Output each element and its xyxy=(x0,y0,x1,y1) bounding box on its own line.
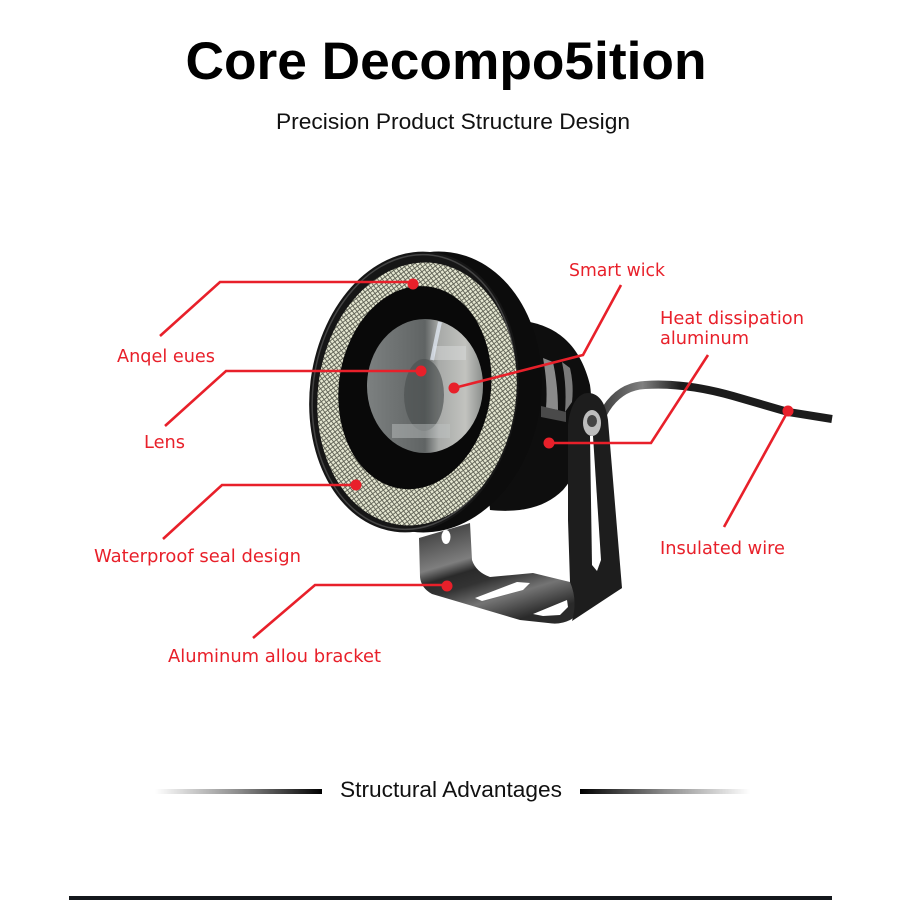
wire xyxy=(603,385,832,419)
product photo: lamp xyxy=(291,237,832,624)
callout: Heat dissipation aluminum xyxy=(544,308,804,448)
mounting bracket xyxy=(419,393,622,624)
callout: Insulated wire xyxy=(660,406,794,559)
callout: Smart wick: Smart wick xyxy=(569,260,666,281)
title: Core Decompo5ition xyxy=(186,32,706,91)
callout: Insulated wire: Insulated wire xyxy=(660,538,785,559)
bottom bar xyxy=(69,896,832,900)
callout: Smart wick xyxy=(448,260,666,394)
lamp rear housing xyxy=(480,322,591,511)
LED angel-eye ring xyxy=(301,250,533,538)
subtitle: Precision Product Structure Design xyxy=(276,109,630,134)
lamp front rim xyxy=(291,237,560,547)
section heading: Structural Advantages xyxy=(155,777,750,802)
callout: Heat dissipation aluminum: aluminum xyxy=(660,328,749,349)
callout: Aluminum alloy bracket: Aluminum allou bracket xyxy=(168,646,381,667)
callout: Angel eyes: Anqel eues xyxy=(117,346,215,367)
callout: Aluminum alloy bracket xyxy=(168,580,452,667)
section heading: Structural Advantages: Structural Advantages xyxy=(340,777,562,802)
callout: Waterproof seal design xyxy=(94,480,362,567)
callout: Waterproof seal design: Waterproof seal design xyxy=(94,546,301,567)
callout: Angel eyes xyxy=(117,278,418,367)
callout: Lens xyxy=(144,366,426,453)
callout: Lens: Lens xyxy=(144,432,185,453)
lens xyxy=(367,319,483,453)
callout: Heat dissipation aluminum: Heat dissipation xyxy=(660,308,804,329)
